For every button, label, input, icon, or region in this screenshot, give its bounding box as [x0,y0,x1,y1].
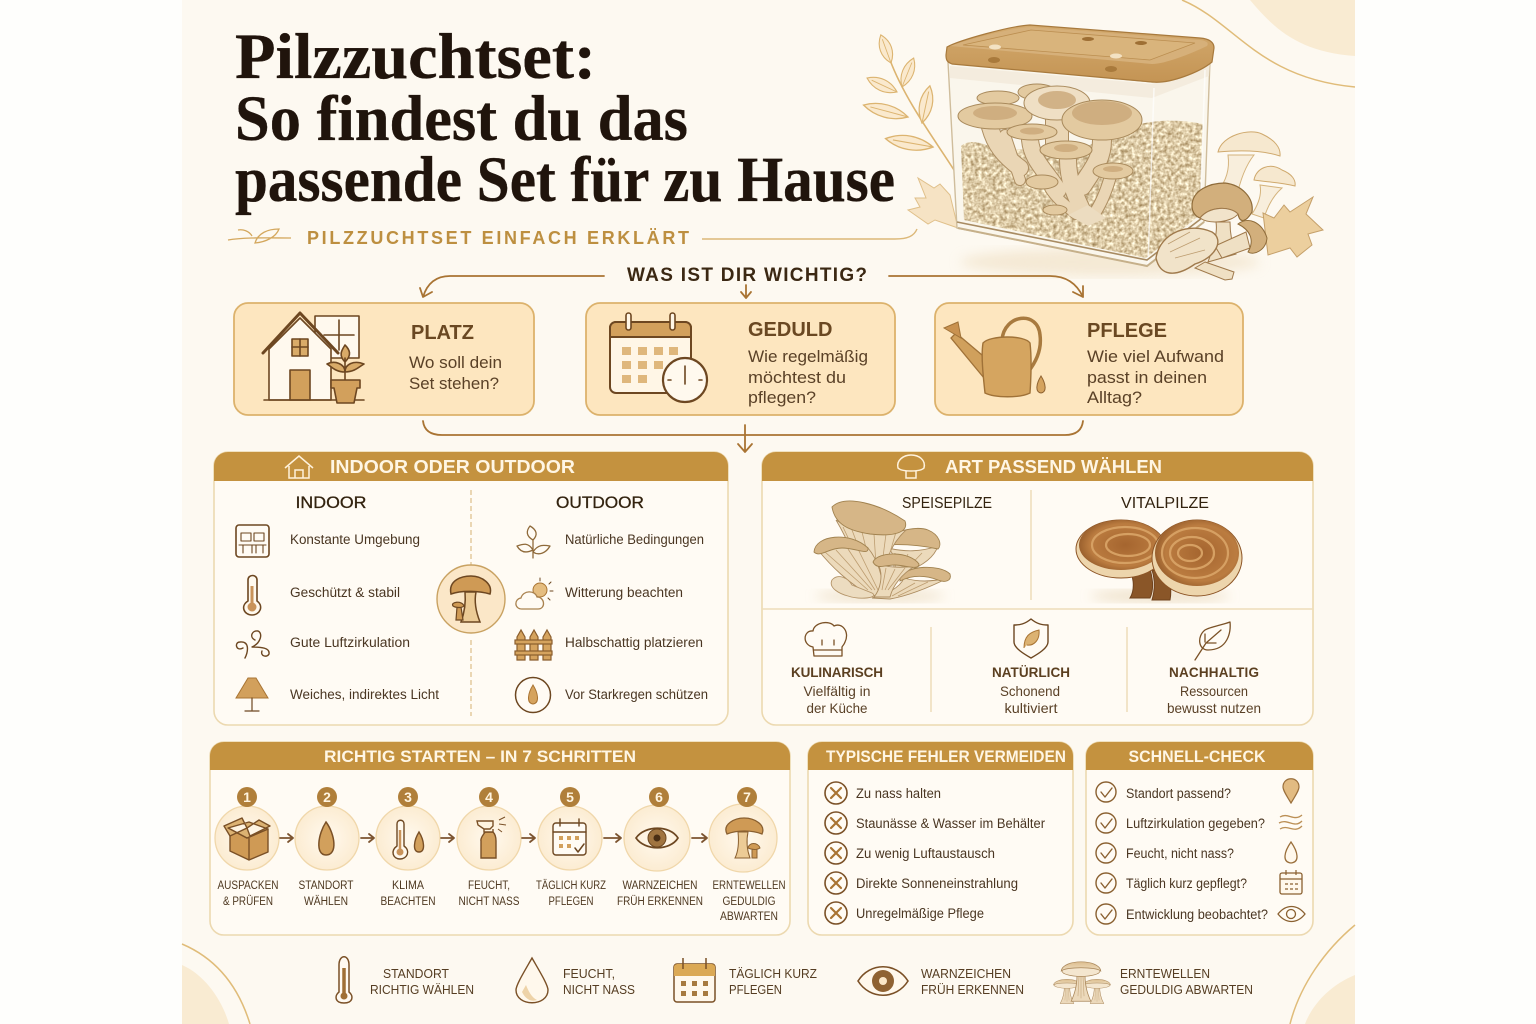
legend strip [336,957,1253,1003]
step number badges: 5 [566,789,574,805]
illustration: oyster mushrooms [814,501,950,602]
caps [977,91,1019,105]
branch with leaves [862,33,954,170]
panel: typische fehler: TYPISCHE FEHLER VERMEIDEN [826,747,1066,766]
list: indoor: Konstante Umgebung [290,532,420,547]
icon: eye [636,828,678,848]
mushrooms in jar [958,84,1142,226]
card: Geduld: GEDULD [748,319,832,341]
pale mushrooms outside [1218,132,1295,218]
list: outdoor: Vor Starkregen schützen [565,687,708,702]
step labels: WARNZEICHEN [622,880,698,892]
icon: calendar [674,958,715,1002]
panel: art passend wählen: kultiviert [1004,700,1058,716]
step labels: FEUCHT, [468,880,510,892]
decorative corners [182,0,1355,1024]
card: Platz: PLATZ [411,322,474,344]
legend strip: FRÜH ERKENNEN [921,983,1024,997]
panel: art passend wählen: Vielfältig in [804,683,870,699]
step labels: NICHT NASS [458,896,520,908]
middle cap [874,564,915,597]
ground shadow [960,248,1260,276]
icon: lamp [236,678,268,711]
legend strip: ERNTEWELLEN [1120,967,1210,981]
icon: calendar with clock [610,313,707,402]
step number badges: 6 [655,789,663,805]
icon: drop [516,958,548,1003]
panel: 7 schritte [210,742,790,935]
panel: schnell-check: Standort passend? [1126,786,1231,801]
card: Geduld [586,303,895,415]
subtitle: PILZZUCHTSET EINFACH ERKLÄRT [307,228,689,248]
step labels: PFLEGEN [548,896,594,908]
panel: schnell-check: Entwicklung beobachtet? [1126,907,1268,922]
icon: water drop [319,822,334,855]
step labels: WÄHLEN [304,896,348,908]
legend strip: FEUCHT, [563,967,615,981]
legend strip: STANDORT [383,967,449,981]
card: Platz: Set stehen? [409,375,499,393]
panel: art passend wählen: KULINARISCH [791,665,883,680]
panel: schnell-check: SCHNELL-CHECK [1128,747,1266,766]
right cap [885,546,938,590]
panel: art passend wählen [762,452,1313,725]
icon: mushroom [726,818,763,858]
title: So findest du das [235,83,688,155]
title: passende Set für zu Hause [235,144,895,216]
step labels: TÄGLICH KURZ [536,880,606,892]
step number badges: 7 [743,789,751,805]
icons: check marks [1096,782,1116,924]
step number badges: 2 [323,789,331,805]
icon: drop outline [1285,842,1297,863]
icon: leaf [1195,622,1230,660]
icon: central mushroom [437,565,505,633]
jar body [948,60,1210,266]
legend strip: GEDULDIG ABWARTEN [1120,983,1253,997]
step number badges [237,787,757,807]
maple leaf left [908,178,958,228]
panel: indoor oder outdoor: OUTDOOR [556,493,644,512]
panel: schnell-check: Feucht, nicht nass? [1126,846,1234,861]
icon: house with plant [263,313,364,403]
substrate [961,121,1203,258]
list: outdoor: Natürliche Bedingungen [565,532,704,547]
list: indoor [236,525,439,711]
icon: wind [1279,815,1302,829]
step circles [215,804,777,872]
step number badges: 3 [404,789,412,805]
panel: schnell-check [1086,742,1313,935]
card: Geduld: pflegen? [748,389,816,407]
step labels: & PRÜFEN [223,896,273,908]
legend strip: WARNZEICHEN [921,967,1011,981]
icon: watering can [944,318,1045,397]
step labels: ABWARTEN [720,911,778,923]
list: outdoor [515,526,708,712]
illustration: reishi mushrooms [1076,520,1242,602]
step labels: KLIMA [392,880,424,892]
icon: mushroom outline [898,455,924,478]
icon: spray bottle [477,817,506,858]
card: Pflege: Wie viel Aufwand [1087,348,1224,366]
icon: thermometer [336,957,352,1003]
icon: box [224,818,270,860]
stems outline [990,115,1110,216]
card: Geduld: möchtest du [748,369,846,387]
step labels [218,880,786,923]
subtitle [228,228,917,248]
icons: x marks [825,782,847,924]
panel: indoor oder outdoor [214,452,728,725]
title [235,21,895,216]
card: Pflege [935,303,1243,415]
step labels: ERNTEWELLEN [712,880,786,892]
list: indoor: Geschützt & stabil [290,585,400,600]
icon: thermometer and drop [393,820,424,859]
icon: eye outline [1278,906,1305,922]
icon: sun and cloud [516,578,553,609]
card: Geduld: Wie regelmäßig [748,348,868,366]
icon: chef hat [805,623,847,656]
maple leaf right [1263,197,1323,257]
icon: sprout [517,526,550,558]
illustration: grow kit jar [862,25,1323,280]
panel: art passend wählen: NATÜRLICH [992,665,1070,680]
low right cap [872,578,948,599]
legend strip: RICHTIG WÄHLEN [370,983,474,997]
arrow: cards to panels [423,421,1083,452]
panel: art passend wählen: SPEISEPILZE [902,495,992,512]
panel: indoor oder outdoor: INDOOR [296,493,366,512]
panel: typische fehler: Unregelmäßige Pflege [856,906,984,921]
panel: art passend wählen: der Küche [806,700,868,716]
icon: calendar check [553,819,586,855]
title: Pilzzuchtset: [235,21,596,93]
panel: art passend wählen: ART PASSEND WÄHLEN [945,457,1162,477]
icon: shelf [236,525,269,557]
legend strip: TÄGLICH KURZ [729,967,817,981]
step number badges: 4 [485,789,493,805]
icon: air swirls [236,631,269,658]
panel: art passend wählen: Schonend [1000,683,1060,699]
list: indoor: Weiches, indirektes Licht [290,687,439,702]
step labels: FRÜH ERKENNEN [617,896,703,908]
loose mushrooms [1156,183,1267,280]
step arrows [280,834,707,842]
panel: typische fehler: Direkte Sonneneinstrahlung [856,876,1018,891]
panel: typische fehler: Staunässe & Wasser im Behälter [856,816,1045,831]
icon: location pin [1283,779,1299,803]
list: outdoor: Witterung beachten [565,585,683,600]
panel: typische fehler: Zu wenig Luftaustausch [856,846,995,861]
panel: art passend wählen: VITALPILZE [1121,495,1209,512]
step labels: GEDULDIG [722,896,776,908]
step labels: BEACHTEN [380,896,436,908]
icon: thermometer [244,576,261,615]
card: Platz [234,303,534,415]
panel: typische fehler: Zu nass halten [856,786,941,801]
step labels: AUSPACKEN [218,880,278,892]
card: Pflege: Alltag? [1087,389,1142,407]
panel: schnell-check: Luftzirkulation gegeben? [1126,816,1265,831]
icon: drop in circle [516,678,550,712]
panel: art passend wählen: NACHHALTIG [1169,665,1259,680]
icon: eye [858,967,908,995]
jar lid [946,25,1214,82]
card: Pflege: PFLEGE [1087,320,1167,342]
panel: typische fehler [808,742,1073,935]
panel: schnell-check: Täglich kurz gepflegt? [1126,876,1247,891]
icon: mushroom cluster [1053,962,1111,1003]
panel: indoor oder outdoor: INDOOR ODER OUTDOOR [330,457,575,477]
big top cap [836,520,906,594]
card: Pflege: passt in deinen [1087,369,1207,387]
question heading: WAS IST DIR WICHTIG? [627,265,867,286]
step number badges: 1 [243,789,251,805]
list: outdoor: Halbschattig platzieren [565,635,703,650]
panel: art passend wählen: bewusst nutzen [1167,700,1261,716]
legend strip: NICHT NASS [563,983,635,997]
icon: shield leaf [1014,619,1048,658]
card: Platz: Wo soll dein [409,354,502,372]
panel: art passend wählen: Ressourcen [1180,683,1248,699]
icon: calendar [1280,870,1302,894]
legend strip: PFLEGEN [729,983,782,997]
background page [182,0,1355,1024]
icon: fence [515,630,552,660]
list: indoor: Gute Luftzirkulation [290,635,410,650]
panel: 7 schritte: RICHTIG STARTEN – IN 7 SCHRITTEN [324,747,636,766]
arrows: from question to cards [420,276,1083,298]
icon: house outline [285,456,313,478]
left cap [818,544,884,596]
step labels: STANDORT [298,880,354,892]
